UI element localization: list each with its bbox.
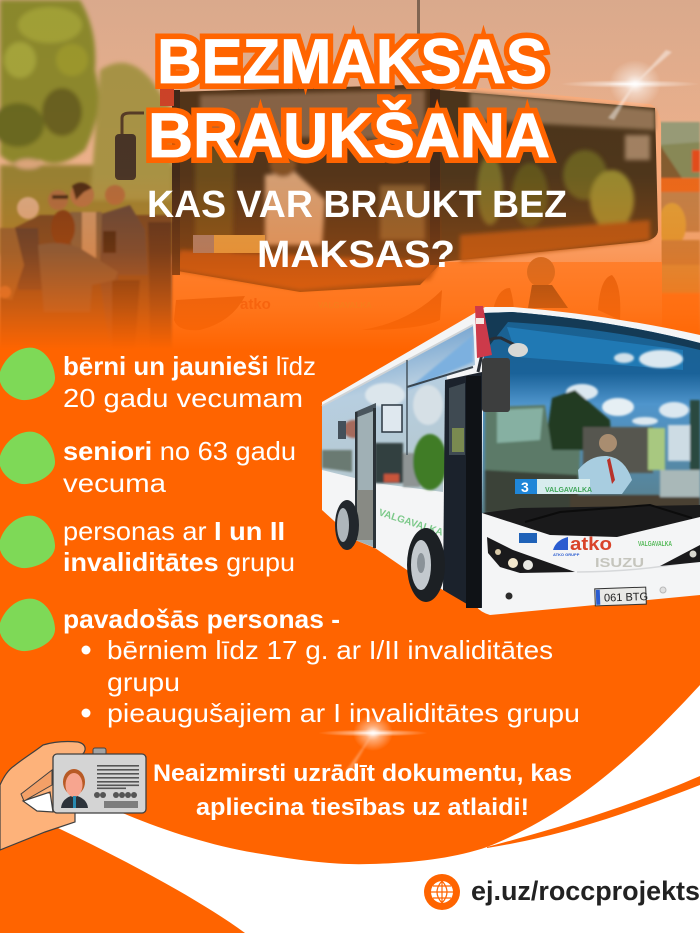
background photo: bus and crowd [0,0,700,350]
icon: hand holding id card [0,741,146,850]
atko logo [553,534,612,557]
thin orange swoosh band [487,776,700,848]
subtitle [147,184,567,276]
rear door [355,403,376,548]
list item 1 [0,348,316,413]
list item 2 [0,432,296,498]
bumper line [577,560,700,572]
number plate [595,587,648,606]
title [148,27,550,171]
bullet blob [0,599,55,651]
headlights right [660,545,700,566]
reminder note [153,760,572,821]
list item 4: bērniem līdz 17 g. ar I/II invaliditātes [107,635,553,665]
route sign [515,479,592,495]
title: BEZMAKSAS [157,27,547,97]
bullet blob [0,348,55,400]
subtitle: MAKSAS? [257,234,455,276]
windscreen [482,312,700,517]
list item 1: 20 gadu vecumam [63,383,303,413]
link: ej.uz/roccprojekts [471,876,700,906]
list item 2: vecuma [63,468,167,498]
isuzu badge: ISUZU [595,555,644,570]
portrait [61,769,88,808]
number plate: 061 BTG [604,591,648,605]
bullet blob [0,516,55,568]
side windows [322,325,475,492]
subtitle: KAS VAR BRAUKT BEZ [147,184,567,226]
front wheel [407,528,445,602]
list item 3 [0,516,295,577]
atko logo: ATKO GRUPP [553,552,580,557]
atko logo: atko [570,534,612,554]
lens flare top [560,50,700,120]
flag [475,306,492,358]
right building [660,120,700,334]
title: BEZMAKSAS [157,27,547,97]
white swoosh [20,685,700,933]
headlights left [487,537,575,573]
rear wheel [335,500,359,550]
bus in the photo [172,0,662,350]
flag and mirror in the photo [115,88,174,180]
lens flare [318,715,428,773]
mirror [478,338,528,412]
clip [93,748,106,760]
entrance door [443,372,482,608]
reminder note: apliecina tiesības uz atlaidi! [196,794,529,821]
route sign: 3 [521,479,529,495]
list item 2: seniori no 63 gadu [63,436,296,466]
list item 4: pavadošās personas - [63,604,340,634]
title: BRAUKŠANA [148,100,550,171]
bus in the photo: VALGAVALKA [318,301,372,310]
list item 4: pieaugušajiem ar I invaliditātes grupu [107,698,580,728]
list item 4 [0,599,580,728]
card [53,754,146,813]
dashboard shadow [482,505,700,537]
bullet blob [0,432,55,484]
title: BRAUKŠANA [148,100,550,171]
driver [578,434,632,494]
list item 4: grupu [107,667,180,697]
list item 3: invaliditātes grupu [63,547,295,577]
green logo: VALGAVALKA [638,539,672,548]
list item 1: bērni un jaunieši līdz [63,351,316,381]
icon: globe [424,874,460,910]
side logo: VALGAVALKA [377,507,444,539]
bus in the photo: atko [240,296,271,313]
id lines [94,765,139,808]
list item 3: personas ar I un II [63,516,285,546]
hero bus photo [322,306,700,615]
bus body [322,307,700,615]
trees [0,0,175,255]
reminder note: Neaizmirsti uzrādīt dokumentu, kas [153,760,572,787]
route sign: VALGAVALKA [545,487,592,494]
crowd [0,182,172,350]
wheelchair sign [519,533,537,543]
